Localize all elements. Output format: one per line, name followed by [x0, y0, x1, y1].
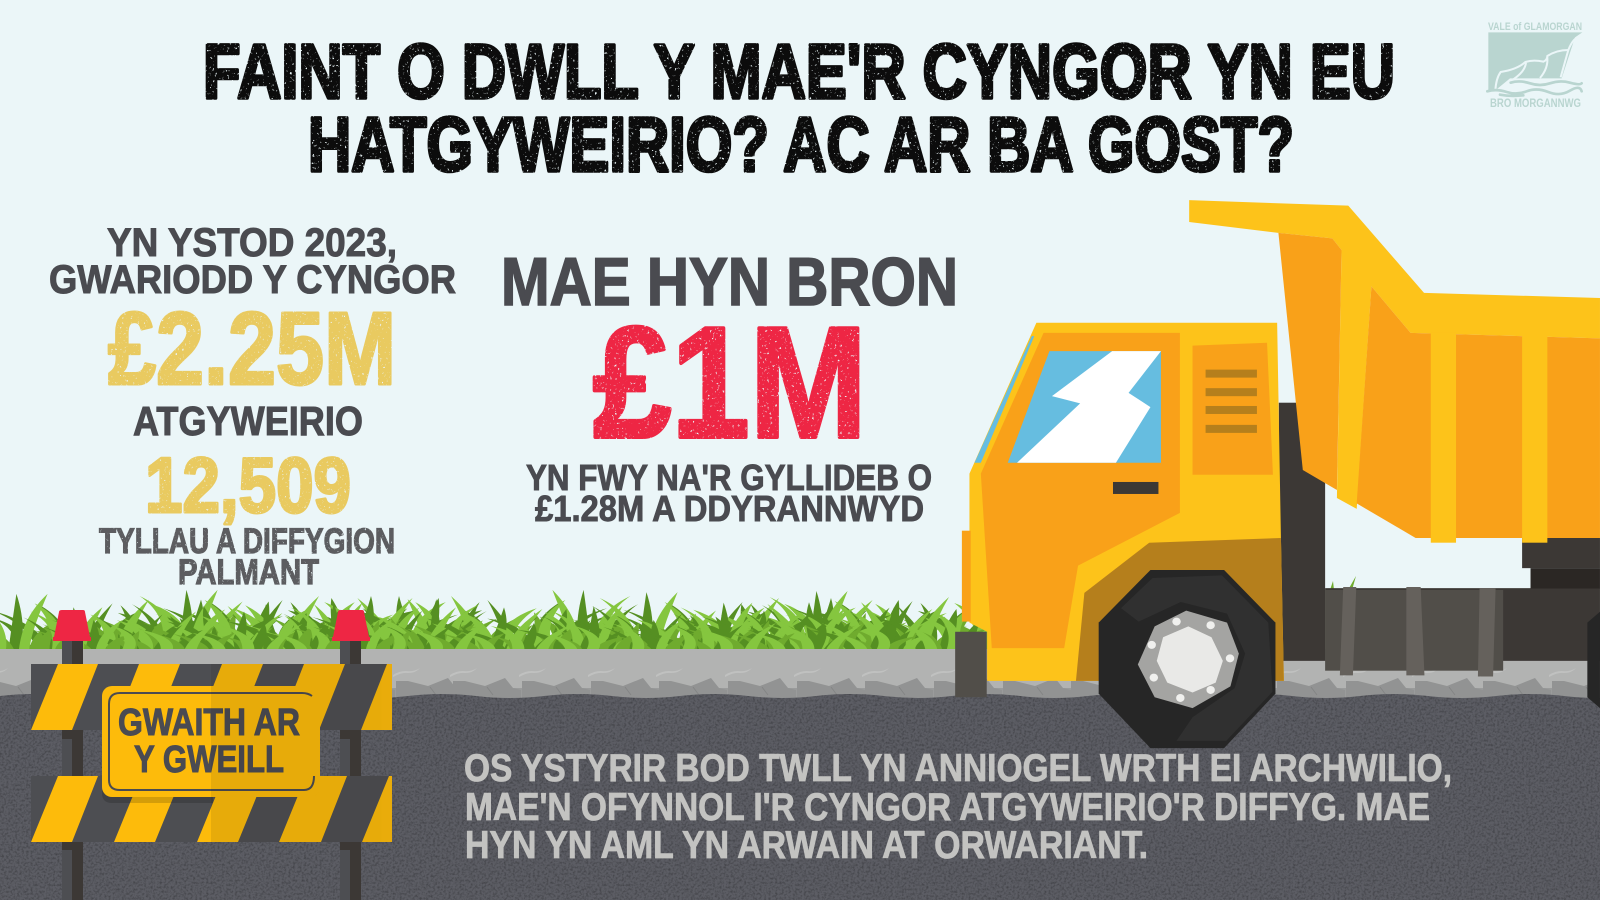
- dump truck: [955, 200, 1600, 748]
- fuel tank: [1325, 587, 1503, 676]
- grass verge: [0, 576, 1356, 649]
- rear wheel: [1587, 612, 1600, 708]
- bottom striped board: [31, 776, 430, 842]
- text block: budget: [526, 457, 932, 529]
- warning lamp left: [53, 610, 91, 641]
- label: tyllau a diffygion palmant: TYLLAU A DIFFYGION: [99, 522, 395, 561]
- title: HATGYWEIRIO? AC AR BA GOST?: [308, 102, 1294, 188]
- warning lamp right: [332, 610, 370, 641]
- stat: £1M: £1M: [593, 295, 867, 471]
- text block: spend intro: GWARIODD Y CYNGOR: [49, 258, 456, 302]
- title: [203, 29, 1395, 188]
- text block: spend intro: [49, 221, 456, 302]
- label: tyllau a diffygion palmant: [99, 522, 395, 592]
- logo: Vale of Glamorgan: BRO MORGANNWG: [1490, 98, 1581, 110]
- door handle: [1113, 482, 1158, 494]
- top striped board: [31, 664, 428, 730]
- label: atgyweirio: ATGYWEIRIO: [133, 398, 363, 444]
- text block: explanation: [464, 747, 1452, 867]
- label: tyllau a diffygion palmant: PALMANT: [178, 553, 319, 592]
- dump bed: [1189, 200, 1600, 543]
- text block: spend intro: YN YSTOD 2023,: [107, 221, 397, 265]
- sign panel: [102, 686, 320, 803]
- text block: budget: £1.28M A DDYRANNWYD: [535, 488, 924, 529]
- windscreen: [1008, 351, 1161, 463]
- roadworks sign: [31, 610, 430, 900]
- logo: Vale of Glamorgan: [1487, 21, 1582, 110]
- kerb: [0, 649, 1600, 703]
- sign panel: GWAITH AR: [118, 702, 300, 744]
- text block: budget: YN FWY NA'R GYLLIDEB O: [526, 457, 932, 498]
- vent: [1193, 343, 1273, 475]
- stat: £2.25M: £2.25M: [108, 291, 396, 406]
- road surface: [0, 694, 1600, 900]
- bumper post: [955, 632, 987, 697]
- shaded right half: [211, 664, 392, 842]
- truck chassis: [1279, 403, 1600, 661]
- text block: explanation: OS YSTYRIR BOD TWLL YN ANNIOGEL WRTH EI ARCHWILIO,: [464, 747, 1452, 790]
- sign posts: [62, 640, 361, 900]
- heading: mae hyn bron: MAE HYN BRON: [501, 244, 958, 320]
- cab: [962, 323, 1284, 681]
- front wheel: [1099, 570, 1275, 748]
- sign panel: Y GWEILL: [134, 739, 284, 781]
- stat: 12,509: 12,509: [145, 441, 351, 529]
- text block: explanation: HYN YN AML YN ARWAIN AT ORWARIANT.: [465, 824, 1148, 867]
- text block: explanation: MAE'N OFYNNOL I'R CYNGOR ATGYWEIRIO'R DIFFYG. MAE: [465, 786, 1430, 829]
